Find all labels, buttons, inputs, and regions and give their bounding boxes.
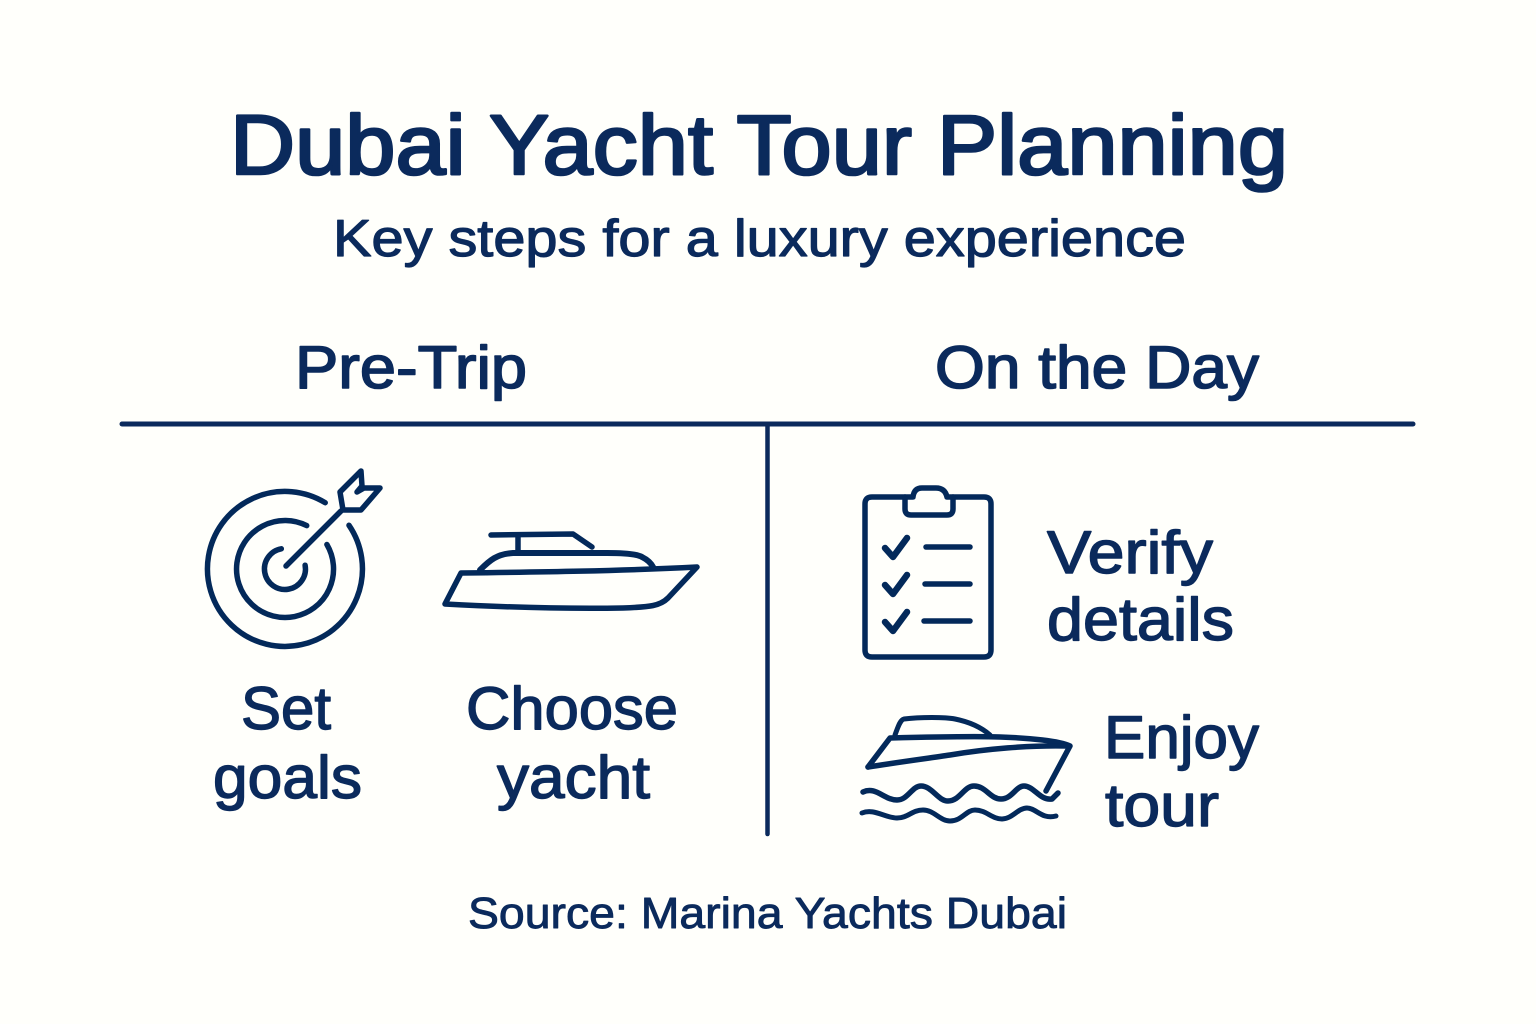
panel: on the day [862,334,1259,839]
title: Dubai Yacht Tour Planning [230,98,1288,192]
label: verify details: details [1047,586,1234,653]
panel: pre-trip [207,334,697,811]
source note: Source: Marina Yachts Dubai [468,889,1067,938]
icon: yacht [445,534,697,608]
label: verify details [1047,519,1234,653]
label: set goals [213,675,362,811]
label: choose yacht: Choose [466,675,678,742]
label: enjoy tour [1104,704,1259,839]
label: verify details: Verify [1047,519,1213,586]
label: choose yacht: yacht [497,744,650,811]
label: set goals: goals [213,744,362,811]
label: set goals: Set [241,675,331,742]
label: enjoy tour: tour [1105,772,1219,839]
label: enjoy tour: Enjoy [1104,704,1259,771]
icon: clipboard checklist [865,488,991,657]
icon: yacht on waves [862,718,1070,821]
subtitle: Key steps for a luxury experience [333,210,1186,268]
icon: target with arrow [207,471,380,646]
label: choose yacht [466,675,678,811]
heading: on the day: On the Day [935,334,1259,401]
heading: pre-trip: Pre-Trip [295,334,527,401]
table frame dividers [122,424,1413,834]
